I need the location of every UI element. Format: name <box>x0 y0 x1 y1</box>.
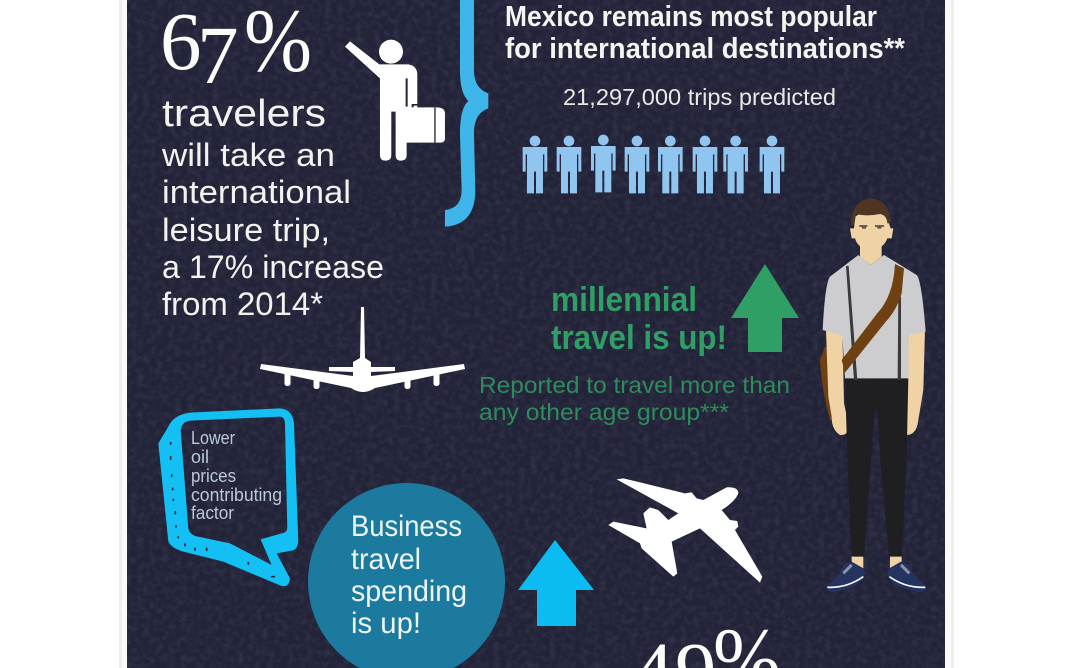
text: reported to travel more: any other age group*** <box>479 399 729 425</box>
bubble text: factor <box>191 503 234 523</box>
heading: 67% statistic: 7 <box>197 9 238 101</box>
bubble text: oil <box>191 447 209 467</box>
text: reported to travel more <box>479 372 790 425</box>
circle: business travel spending: travel <box>351 543 421 576</box>
bubble text: contributing <box>191 485 282 505</box>
circle: business travel spending: Business <box>351 510 462 543</box>
icon: curly brace <box>445 0 488 227</box>
circle: business travel spending <box>308 483 505 668</box>
heading: 67% statistic <box>160 0 312 101</box>
speech bubble outline <box>158 408 298 586</box>
text block: travelers will take a leisure trip: travelers <box>162 93 326 135</box>
text block: travelers will take a leisure trip: leisure trip, <box>162 212 330 248</box>
text block: travelers will take a leisure trip: international <box>162 174 351 210</box>
text block: travelers will take a leisure trip: will take an <box>161 137 335 173</box>
arrow: blue up <box>518 540 594 626</box>
bubble text <box>191 428 282 523</box>
statistic: 49% cropped at bottom <box>632 611 781 668</box>
heading: millennial travel is up: millennial <box>551 281 697 319</box>
callout: lower oil prices speech bubble <box>158 408 298 586</box>
bubble text: Lower <box>191 428 235 448</box>
circle: business travel spending: spending <box>351 575 467 608</box>
bubble text: prices <box>191 466 236 486</box>
page frame <box>119 0 954 668</box>
arrow: green up <box>731 264 799 352</box>
pictogram row: eight people <box>523 135 784 193</box>
icon: traveler with suitcase <box>345 40 445 161</box>
text block: travelers will take a leisure trip: from 2014* <box>162 286 323 322</box>
heading: Mexico remains most popular: for international destinations** <box>505 33 906 65</box>
heading: millennial travel is up <box>551 281 727 357</box>
text block: travelers will take a leisure trip: a 17% increase <box>162 249 384 285</box>
text block: travelers will take a leisure trip <box>161 93 384 322</box>
panel: dark textured background <box>127 0 945 668</box>
icon: airplane front view <box>260 307 465 392</box>
text: reported to travel more: Reported to travel more than <box>479 372 790 398</box>
heading: Mexico remains most popular: Mexico remains most popular <box>505 1 877 33</box>
icon: airplane in flight <box>608 478 762 583</box>
illustration: millennial man <box>820 198 926 592</box>
bubble specks <box>171 443 274 577</box>
circle: business travel spending: is up! <box>351 607 421 640</box>
text: trips predicted: 21,297,000 trips predicted <box>563 84 836 110</box>
heading: Mexico remains most popular <box>505 1 906 65</box>
heading: millennial travel is up: travel is up! <box>551 319 727 357</box>
